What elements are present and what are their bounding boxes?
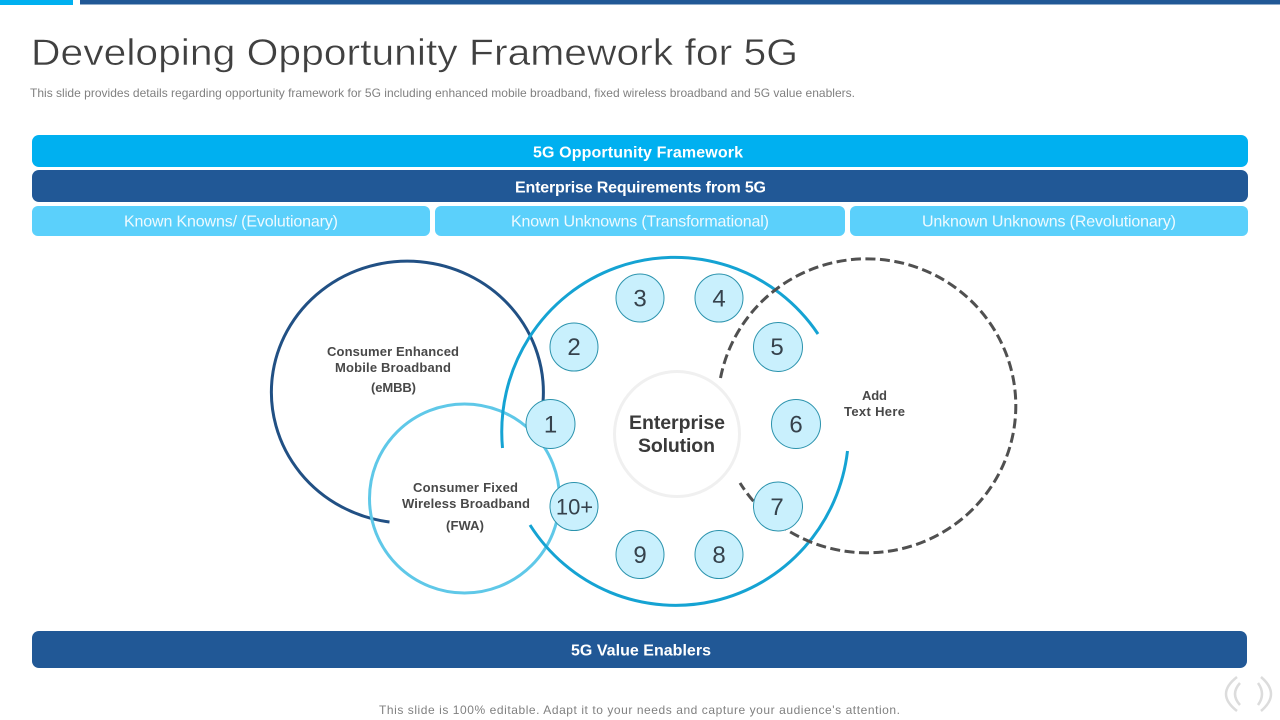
node 5	[754, 322, 802, 372]
subtitle: This slide provides details regarding opportunity framework for 5G including enhanced mobile broadband, fixed wireless broadband and 5G value enablers.	[30, 86, 855, 100]
center circle: enterprise solution	[614, 372, 740, 496]
title: Developing Opportunity Framework for 5G	[31, 31, 798, 73]
arc: dashed add text here	[720, 259, 1016, 553]
node 9: 9	[633, 542, 647, 569]
label: FWA: Consumer Fixed	[413, 480, 518, 495]
node 3	[616, 274, 664, 322]
node 7	[754, 482, 802, 531]
label: add text here: Add	[862, 388, 887, 403]
node 10+: 10+	[556, 494, 593, 520]
label: add text here	[844, 388, 905, 419]
column: Unknown Unknowns: Unknown Unknowns (Revolutionary)	[922, 214, 1176, 230]
node 8	[695, 530, 743, 578]
icon: watermark signal arcs	[1226, 677, 1271, 711]
label: add text here: Text Here	[844, 404, 905, 419]
node 4: 4	[712, 286, 726, 312]
circle: consumer fixed wireless broadband	[370, 404, 560, 593]
column: Known Knowns	[32, 206, 430, 236]
column: Known Knowns: Known Knowns/ (Evolutionary)	[124, 214, 338, 230]
arc: consumer enhanced mobile broadband	[271, 261, 543, 522]
top accent strip	[0, 0, 1280, 5]
center circle: enterprise solution: Enterprise	[629, 412, 725, 434]
label: FWA	[402, 480, 530, 533]
banner: 5G Value Enablers: 5G Value Enablers	[571, 642, 711, 660]
column: Known Unknowns	[435, 206, 845, 236]
label: eMBB: Consumer Enhanced	[327, 344, 459, 359]
banner: 5G Opportunity Framework	[32, 135, 1248, 167]
node 7: 7	[770, 494, 784, 521]
column: Known Unknowns: Known Unknowns (Transformational)	[511, 214, 769, 230]
banner: Enterprise Requirements from 5G: Enterprise Requirements from 5G	[515, 180, 766, 196]
node 5: 5	[770, 334, 784, 361]
node 1	[526, 400, 575, 448]
venn diagram	[271, 257, 1016, 605]
node 1: 1	[544, 412, 557, 438]
center circle: enterprise solution: Solution	[638, 435, 715, 457]
node 4	[695, 274, 743, 322]
arc: enterprise ring lower	[530, 451, 848, 605]
column: Unknown Unknowns	[850, 206, 1248, 236]
node 8: 8	[712, 542, 726, 569]
node 2	[550, 323, 598, 371]
node 10+	[550, 482, 598, 530]
node 9	[616, 530, 664, 578]
node 6: 6	[789, 412, 803, 438]
node 6	[772, 400, 820, 448]
banner: Enterprise Requirements from 5G	[32, 170, 1248, 202]
footer note: This slide is 100% editable. Adapt it to your needs and capture your audience's attention.	[379, 703, 900, 717]
banner: 5G Opportunity Framework: 5G Opportunity Framework	[533, 144, 743, 162]
arc: enterprise ring upper	[502, 257, 818, 448]
banner: 5G Value Enablers	[32, 631, 1247, 668]
node 2: 2	[567, 334, 581, 361]
node 3: 3	[633, 286, 647, 312]
label: eMBB: (eMBB)	[371, 380, 416, 395]
label: FWA: Wireless Broadband	[402, 496, 530, 511]
label: FWA: (FWA)	[446, 518, 484, 533]
label: eMBB	[327, 344, 459, 395]
label: eMBB: Mobile Broadband	[335, 360, 451, 375]
